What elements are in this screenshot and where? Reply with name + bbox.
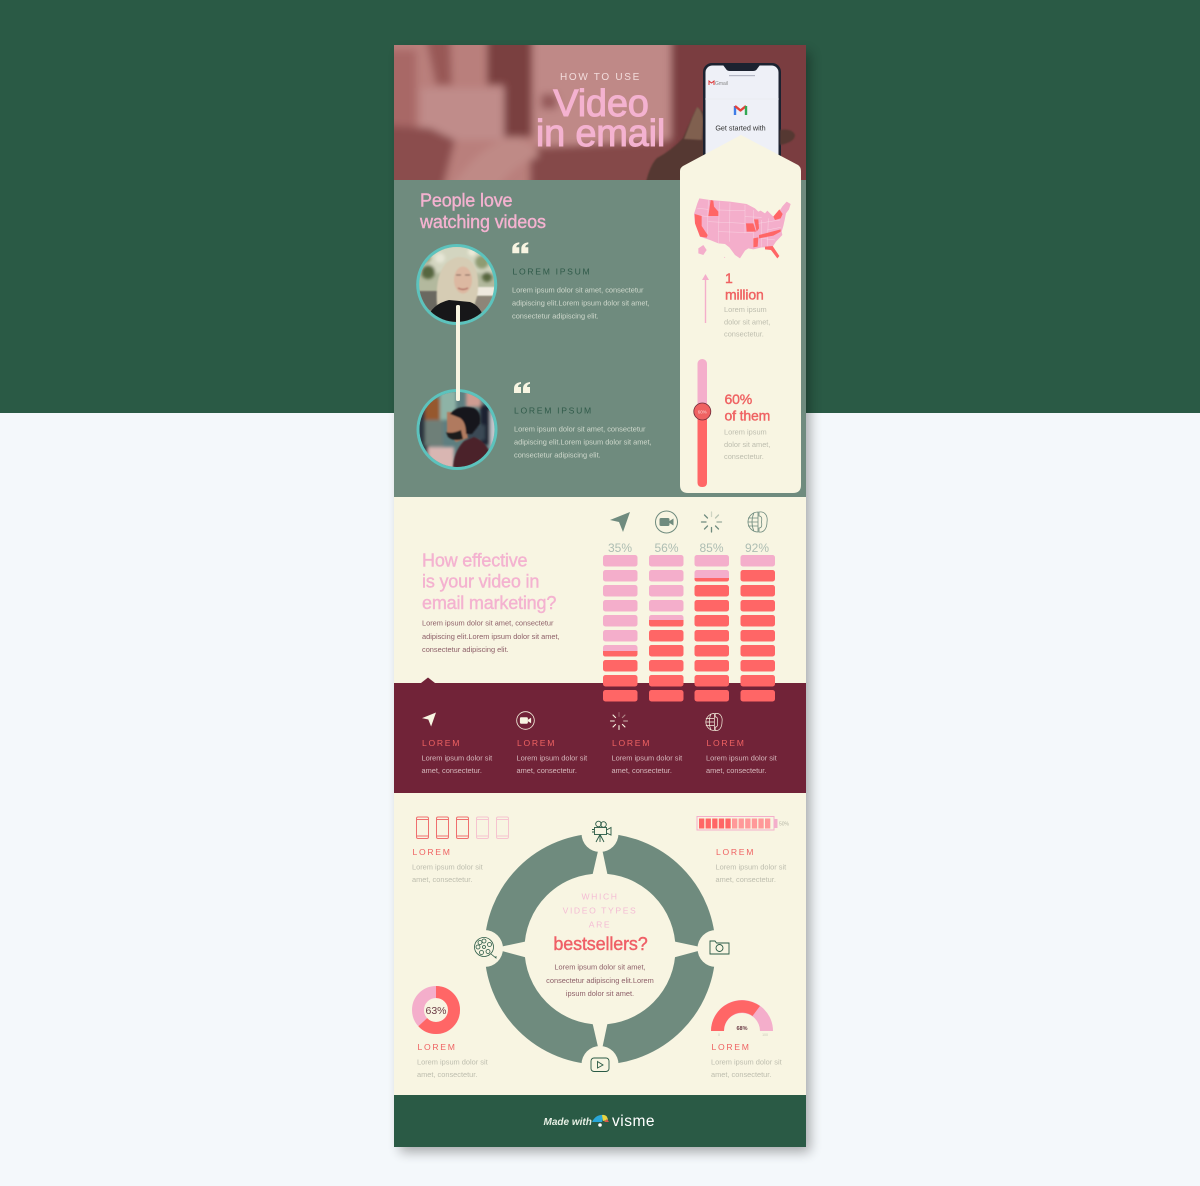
testimonial two copy: [514, 424, 652, 460]
icons above bars: [610, 511, 767, 533]
legend copy: Lorem ipsum dolor sit: [706, 754, 777, 762]
testimonial two: [514, 382, 652, 460]
testimonial one copy: adipiscing elit.Lorem ipsum dolor sit amet,: [512, 298, 650, 308]
battery label: 50%: [779, 822, 790, 828]
icon: quote marks: [512, 242, 528, 253]
stat copy: consectetur.: [724, 452, 764, 461]
heading: people love watching videos: People love: [420, 190, 513, 210]
chart: donut ring with four segments: [466, 815, 734, 1083]
heading: how effective: [422, 550, 556, 613]
footer brand: visme: [612, 1113, 655, 1130]
item label: LOREM: [418, 1042, 457, 1052]
item copy: amet, consectetur.: [716, 875, 776, 884]
chart: stacked bar columns: [603, 555, 775, 702]
column 56 percent: [649, 555, 684, 702]
slider label: 60%: [698, 410, 707, 414]
text: effectiveness copy: [422, 618, 560, 654]
section background: effectiveness: [394, 497, 806, 683]
legend item four: [705, 713, 777, 775]
testimonial one copy: [512, 286, 650, 320]
item copy: [716, 862, 786, 884]
testimonial one label: LOREM IPSUM: [512, 266, 591, 276]
item copy: Lorem ipsum dolor sit: [417, 1058, 488, 1066]
section background: bestsellers: [394, 793, 806, 1095]
text: ring centre heading: [546, 892, 654, 998]
gauge scale: 0: [718, 1033, 720, 1037]
legend item three: [610, 712, 682, 775]
item: bottom left: [417, 1042, 488, 1079]
stat copy: [724, 305, 770, 338]
ring kicker: ARE: [589, 920, 611, 930]
item copy: amet, consectetur.: [412, 875, 472, 884]
percentage labels: [608, 541, 769, 555]
text: Gmail app label: Gmail: [715, 81, 728, 87]
stat copy: [724, 428, 770, 461]
chart: half gauge 68 percent: [711, 1000, 773, 1037]
background lower band: [0, 413, 1200, 1186]
title: [536, 72, 665, 155]
ring copy: [546, 962, 654, 998]
icon: loading spinner: [610, 712, 628, 730]
chart: battery gauge 50 percent: [697, 816, 790, 830]
percentage labels: 56%: [654, 541, 679, 555]
heading: how effective: How effective: [422, 550, 528, 570]
ring kicker: WHICH: [581, 892, 619, 902]
gauge scale: 100: [762, 1033, 768, 1037]
icon: photo camera: [710, 941, 729, 954]
stat: 60 percent of them: [724, 391, 770, 461]
panel shadow: [400, 52, 810, 1152]
item copy: [711, 1058, 782, 1079]
heading: how effective: is your video in: [422, 572, 539, 592]
title line one: Video: [553, 83, 649, 125]
connector line between portraits: [456, 305, 460, 401]
item label: LOREM: [712, 1042, 751, 1052]
text: effectiveness copy: Lorem ipsum dolor sit amet, consectetur: [422, 618, 554, 628]
legend label: LOREM: [517, 738, 556, 748]
column 92 percent: [740, 555, 775, 702]
title kicker: HOW TO USE: [560, 72, 641, 83]
item: top right: [716, 847, 786, 884]
item copy: [417, 1058, 488, 1079]
heading: people love watching videos: [419, 190, 546, 232]
item: top left: [412, 847, 483, 884]
footer script text: Made with: [544, 1117, 592, 1128]
icon: video camera: [517, 712, 534, 729]
legend label: LOREM: [706, 738, 746, 748]
legend copy: Lorem ipsum dolor sit: [516, 754, 587, 762]
item copy: [412, 862, 483, 884]
percentage labels: 35%: [608, 541, 632, 555]
stat copy: Lorem ipsum: [724, 428, 767, 436]
stat copy: Lorem ipsum: [724, 305, 767, 314]
icon: up arrow: [702, 274, 709, 323]
icon: send arrow: [422, 712, 436, 726]
legend copy: Lorem ipsum dolor sit: [422, 754, 492, 762]
stat copy: dolor sit amet,: [724, 318, 770, 326]
legend item two: [516, 712, 587, 775]
chart: vertical slider 60 percent: [694, 359, 711, 487]
column 85 percent: [694, 555, 729, 702]
testimonial two copy: adipiscing elit.Lorem ipsum dolor sit amet,: [514, 438, 652, 446]
ring heading: bestsellers?: [553, 934, 648, 954]
legend copy: amet, consectetur.: [516, 766, 577, 775]
stat copy: consectetur.: [724, 330, 764, 338]
icon: video play: [591, 1058, 609, 1072]
legend item one: [422, 712, 492, 775]
chart: phone pictogram: [416, 817, 508, 838]
text: effectiveness copy: adipiscing elit.Lorem ipsum dolor sit amet,: [422, 632, 560, 641]
icon: globe phone: [705, 713, 722, 731]
chart: donut 63 percent: [418, 992, 454, 1028]
photo: man portrait: [416, 389, 498, 472]
header panel with blurred photo: [394, 45, 806, 180]
icon: visme logo: [592, 1115, 609, 1127]
icon: film reel: [474, 938, 496, 958]
section background: maroon legend: [394, 678, 806, 793]
ring copy: ipsum dolor sit amet.: [566, 989, 634, 998]
legend copy: amet, consectetur.: [422, 766, 482, 775]
testimonial two label: LOREM IPSUM: [514, 406, 593, 416]
legend label: LOREM: [422, 738, 461, 748]
photo: woman portrait: [416, 244, 500, 330]
section background: people love videos: [394, 180, 806, 497]
icon: mail logo: [735, 106, 746, 115]
heading: how effective: email marketing?: [422, 593, 556, 613]
item label: LOREM: [716, 847, 755, 857]
testimonial one: [512, 242, 650, 320]
icon: send arrow: [610, 512, 630, 532]
legend copy: [422, 754, 492, 775]
stat value: 1: [725, 270, 733, 286]
item label: LOREM: [412, 847, 452, 857]
legend copy: amet, consectetur.: [612, 766, 672, 775]
legend copy: [516, 754, 587, 775]
testimonial two copy: Lorem ipsum dolor sit amet, consectetur: [514, 424, 646, 434]
icon: globe phone: [748, 512, 767, 532]
gauge scale: [718, 1033, 768, 1037]
title line two: in email: [536, 113, 665, 155]
item: bottom right: [711, 1042, 782, 1079]
panel: statistics card: [680, 135, 801, 493]
text: phone caption: Get started with: [715, 124, 766, 132]
icon: video camera: [656, 511, 678, 533]
legend copy: Lorem ipsum dolor sit: [612, 754, 682, 762]
testimonial one copy: consectetur adipiscing elit.: [512, 312, 599, 320]
item copy: amet, consectetur.: [417, 1070, 477, 1079]
legend copy: amet, consectetur.: [706, 766, 766, 775]
testimonial two copy: consectetur adipiscing elit.: [514, 450, 601, 460]
legend label: LOREM: [612, 738, 651, 748]
item copy: Lorem ipsum dolor sit: [412, 862, 483, 872]
percentage labels: 85%: [699, 541, 724, 555]
text: effectiveness copy: consectetur adipiscing elit.: [422, 645, 509, 654]
gauge value: 68%: [736, 1026, 748, 1032]
stat value: million: [725, 286, 764, 302]
icon: loading spinner: [702, 512, 722, 532]
stat value: [725, 270, 764, 302]
footer credit: [544, 1113, 655, 1130]
item copy: Lorem ipsum dolor sit: [711, 1058, 782, 1066]
stat value: [724, 391, 770, 424]
icon: quote marks: [514, 382, 530, 393]
legend copy: [706, 754, 777, 775]
testimonial one copy: Lorem ipsum dolor sit amet, consectetur: [512, 286, 644, 294]
heading: people love watching videos: watching videos: [419, 212, 546, 232]
donut value: 63%: [425, 1005, 447, 1017]
ring kicker: VIDEO TYPES: [563, 906, 637, 916]
item copy: amet, consectetur.: [711, 1070, 771, 1079]
icon: film camera: [592, 821, 611, 842]
icon: phone in hand: [646, 63, 795, 182]
column 35 percent: [603, 555, 638, 702]
ring kicker: [563, 892, 637, 930]
ring copy: Lorem ipsum dolor sit amet,: [554, 962, 646, 972]
map: United States: [694, 198, 791, 258]
legend copy: [612, 754, 682, 775]
ring copy: consectetur adipiscing elit.Lorem: [546, 976, 654, 985]
percentage labels: 92%: [745, 541, 769, 555]
stat value: 60%: [724, 391, 752, 407]
footer band: [394, 1095, 806, 1147]
stat: 1 million: [724, 270, 770, 338]
stat value: of them: [724, 408, 770, 424]
background top band: [0, 0, 1200, 413]
item copy: Lorem ipsum dolor sit: [716, 862, 786, 872]
stat copy: dolor sit amet,: [724, 440, 770, 449]
